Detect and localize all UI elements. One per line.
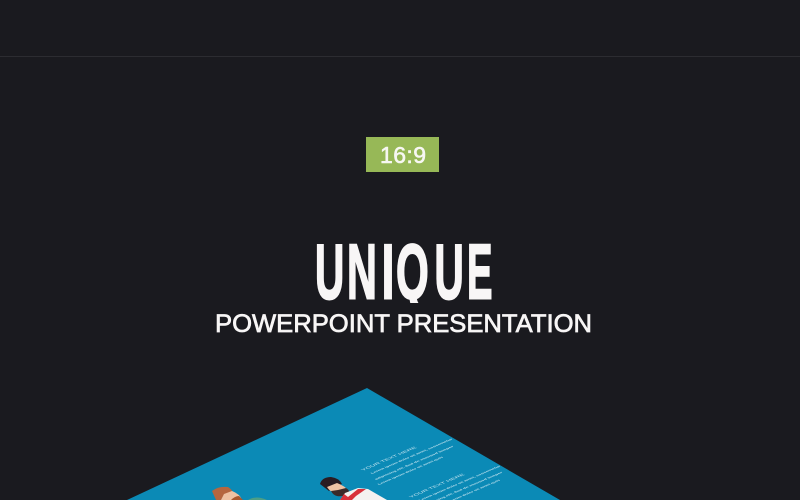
title: UNIQUE: E	[467, 229, 492, 316]
text block: lower: YOUR TEXT HERE	[408, 473, 467, 499]
text block: upper: Lorem ipsum dolor sit amet quis	[377, 456, 444, 485]
text block: upper: YOUR TEXT HERE	[360, 446, 419, 472]
figure: bearded person in green	[212, 487, 267, 500]
text block: upper: Lorem ipsum dolor sit amet, consectetur	[370, 438, 454, 474]
text block: upper: adipiscing elit. Sed do eiusmod tempor	[374, 445, 455, 480]
figure: man in red and white shirt	[320, 477, 387, 500]
title: UNIQUE: Q	[396, 229, 429, 316]
isometric slide preview	[127, 388, 560, 500]
badge: 16:9	[366, 137, 439, 172]
title: UNIQUE: U	[315, 229, 344, 316]
subtitle: PowerPoint Presentation: POWERPOINT PRESENTATION	[215, 310, 592, 338]
slide panel: blue diamond	[127, 388, 560, 500]
title: UNIQUE: I	[382, 228, 395, 315]
badge: 16:9: 16:9	[380, 142, 426, 168]
title: UNIQUE: N	[347, 229, 377, 316]
title: UNIQUE	[316, 243, 492, 303]
title: UNIQUE: U	[434, 229, 464, 316]
text block: upper	[360, 438, 455, 485]
